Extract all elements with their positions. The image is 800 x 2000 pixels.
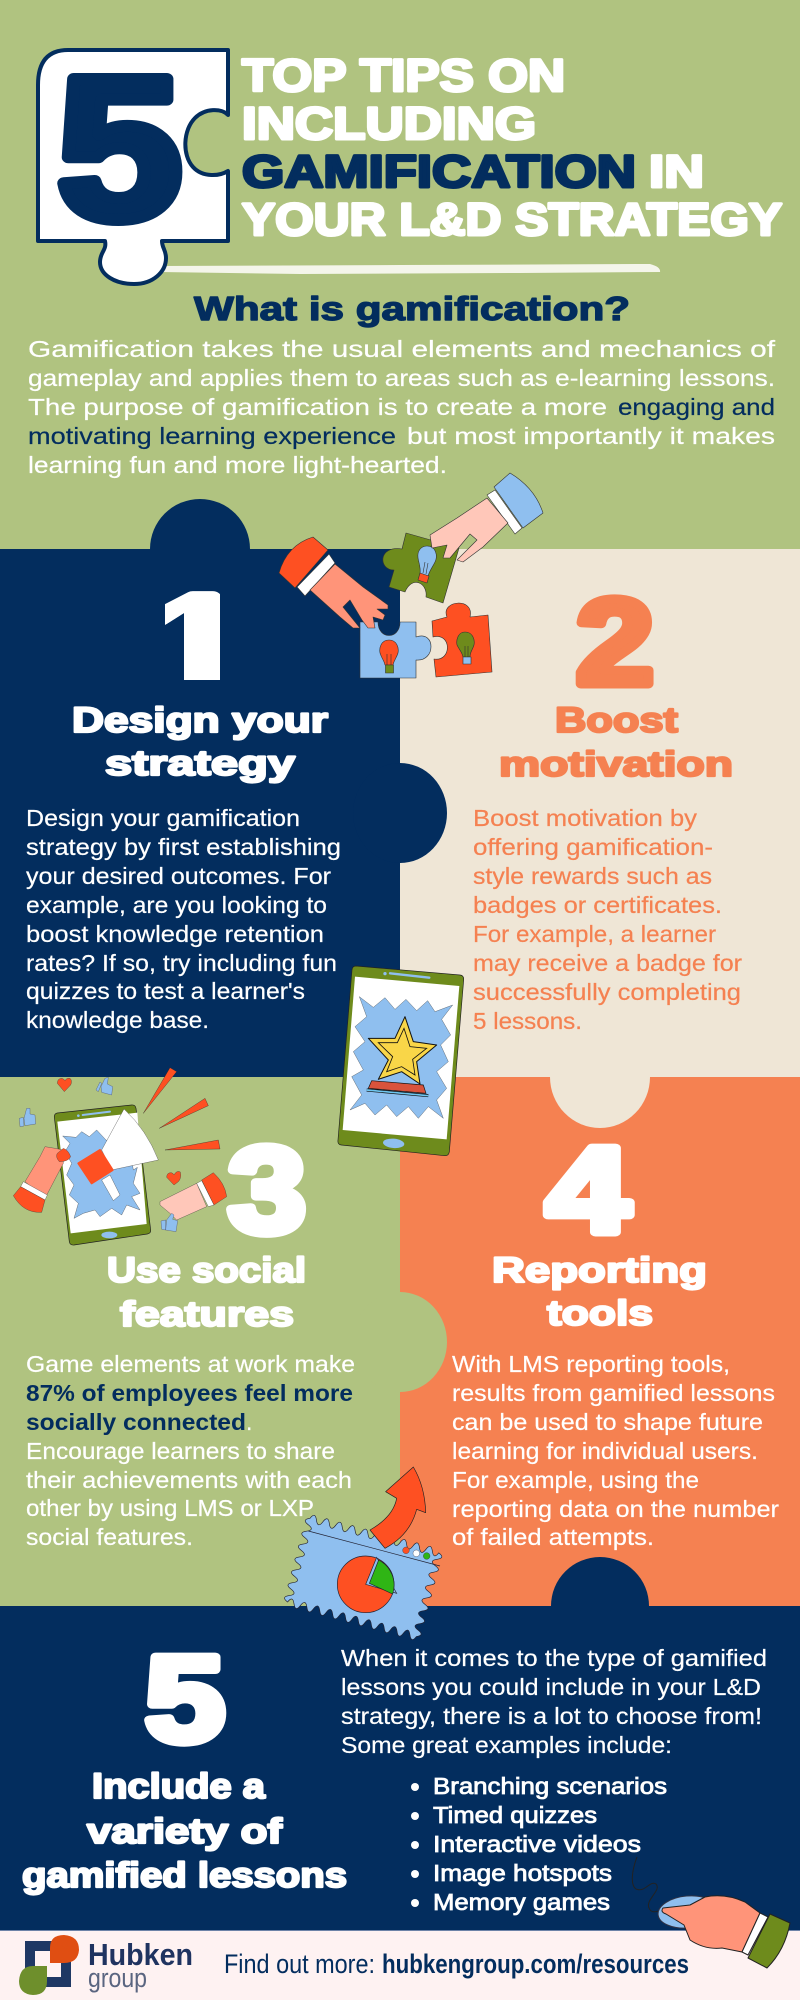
- tip 1 text: Design your gamification: [26, 805, 300, 831]
- tip 5 list: [411, 1773, 667, 1915]
- tip 1 text: quizzes to test a learner's: [26, 978, 305, 1004]
- icon: megaphone: [78, 1109, 158, 1201]
- puzzle tab: tip 2: [550, 1077, 650, 1128]
- tip 3 text: social features.: [26, 1524, 193, 1550]
- tip 3 text: their achievements with each: [26, 1467, 352, 1493]
- panel: tip 3 background: [0, 1077, 400, 1606]
- icon: sound rays: [143, 1068, 220, 1150]
- tip 1 number: 1: [156, 572, 241, 708]
- tip 5 text: lessons you could include in your L&D: [341, 1674, 761, 1700]
- tip 4 text: reporting data on the number: [452, 1496, 779, 1522]
- puzzle tab: tip 3: [353, 1292, 447, 1392]
- tip 4 heading: tools: [547, 1294, 653, 1333]
- tip 5 heading: [22, 1767, 347, 1895]
- tip 5 list: Branching scenarios: [433, 1773, 667, 1799]
- panel: tip 2 background: [400, 549, 800, 1077]
- illustration: tablet with megaphone and hands: [13, 1068, 227, 1245]
- intro text: engaging and: [618, 394, 775, 420]
- illustration: hand on mouse: [632, 1857, 790, 1968]
- tip 5 list: Image hotspots: [433, 1860, 612, 1886]
- tip 4 text: results from gamified lessons: [452, 1380, 775, 1406]
- tip 5 list: Interactive videos: [433, 1831, 641, 1857]
- icon: red puzzle piece: [432, 603, 492, 677]
- logo: Hubken group: [19, 1935, 193, 1995]
- tip 5 number: 5: [145, 1631, 225, 1767]
- tip 2 text: may receive a badge for: [473, 950, 742, 976]
- illustration: hands joining puzzle pieces: [279, 473, 543, 678]
- icon: green puzzle piece: [383, 533, 459, 603]
- logo: Hubken group: group: [88, 1963, 147, 1993]
- tip 5 list: Memory games: [433, 1889, 610, 1915]
- icon: hearts: [57, 1078, 181, 1185]
- tip 1 text: rates? If so, try including fun: [26, 950, 337, 976]
- tip 3 text: Game elements at work make: [26, 1351, 355, 1377]
- tip 2 heading: Boost: [555, 701, 678, 740]
- icon: hand with thumb: [160, 1173, 227, 1220]
- intro text: gameplay and applies them to areas such as e-learning lessons.: [28, 365, 775, 391]
- brush underline: [160, 264, 660, 274]
- tip 2 heading: motivation: [499, 745, 733, 784]
- tip 3 text: .: [246, 1409, 252, 1435]
- icon: mouse: [657, 1893, 719, 1931]
- panel: tip 4 background: [400, 1077, 800, 1606]
- panel: footer: [0, 1930, 800, 2000]
- footer call to action: Find out more:: [224, 1949, 375, 1979]
- tip 2 text: [473, 805, 742, 1034]
- footer call to action: hubkengroup.com/resources: [382, 1949, 689, 1979]
- tip 4 text: learning for individual users.: [452, 1438, 758, 1464]
- tip 2 text: successfully completing: [473, 979, 741, 1005]
- intro text: learning fun and more light-hearted.: [28, 452, 447, 478]
- tip 1 text: [26, 805, 341, 1033]
- tip 2 text: offering gamification-: [473, 834, 713, 860]
- panel: tip 1 background: [0, 499, 400, 1077]
- tip 2 text: badges or certificates.: [473, 892, 722, 918]
- tip 1 text: strategy by first establishing: [26, 834, 341, 860]
- icon: hand: [662, 1896, 760, 1952]
- tip 4 heading: Reporting: [492, 1251, 707, 1290]
- icon: thumbs up: [19, 1077, 178, 1232]
- icon: cuff: [742, 1913, 790, 1968]
- tip 4 text: can be used to shape future: [452, 1409, 763, 1435]
- tip 1 text: boost knowledge retention: [26, 921, 324, 947]
- tip 5 text: When it comes to the type of gamified: [341, 1645, 767, 1671]
- intro text: but most importantly it makes: [407, 423, 775, 449]
- icon: tablet: [54, 1105, 151, 1245]
- tip 4 text: of failed attempts.: [452, 1524, 654, 1550]
- illustration: tablet with star trophy: [338, 966, 464, 1156]
- icon: left hand: [279, 537, 388, 628]
- tip 3 heading: [107, 1251, 306, 1334]
- tip 3 text: [26, 1351, 355, 1550]
- illustration: pie chart window with arrow: [283, 1467, 444, 1641]
- tip 5 heading: variety of: [87, 1812, 282, 1851]
- tip 4 heading: [492, 1251, 707, 1333]
- title: TOP TIPS ON: [242, 50, 565, 101]
- tip 5 list: Timed quizzes: [433, 1802, 597, 1828]
- tip 3 heading: Use social: [107, 1251, 306, 1290]
- puzzle badge with number 5: [38, 35, 228, 284]
- tip 1 text: example, are you looking to: [26, 892, 327, 918]
- icon: mouse cable: [632, 1857, 659, 1912]
- icon: scalloped window: [283, 1513, 444, 1641]
- tip 2 heading: [499, 701, 733, 784]
- tip 2 text: 5 lessons.: [473, 1008, 582, 1034]
- tip 1 text: your desired outcomes. For: [26, 863, 331, 889]
- tip 5 text: Some great examples include:: [341, 1732, 672, 1758]
- tip 1 heading: strategy: [105, 744, 296, 783]
- tip 2 number: 2: [576, 574, 654, 710]
- heading: what is gamification: What is gamification?: [194, 290, 630, 327]
- arrow: [370, 1467, 426, 1548]
- tip 3 text: socially connected: [26, 1409, 246, 1435]
- tip 3 number: 3: [228, 1122, 306, 1258]
- tip 5 text: strategy, there is a lot to choose from!: [341, 1703, 762, 1729]
- icon: window bar: [308, 1531, 440, 1566]
- title: INCLUDING: [242, 98, 536, 149]
- puzzle badge with number 5: 5: [57, 35, 182, 261]
- tip 4 text: [452, 1351, 779, 1550]
- tip 1 heading: [72, 701, 328, 783]
- logo: Hubken group: Hubken: [88, 1937, 193, 1972]
- title: IN: [649, 146, 704, 197]
- puzzle tab: tip 1: [353, 763, 447, 863]
- icon: hand with heart: [13, 1147, 71, 1212]
- tip 5 text: [341, 1645, 767, 1758]
- title: YOUR L&D STRATEGY: [242, 194, 782, 245]
- tip 1 text: knowledge base.: [26, 1007, 209, 1033]
- intro text: [28, 336, 776, 478]
- tip 5 heading: Include a: [92, 1767, 266, 1806]
- title: GAMIFICATION: [242, 146, 636, 197]
- tip 5 heading: gamified lessons: [22, 1856, 347, 1895]
- tip 3 text: 87% of employees feel more: [26, 1380, 353, 1406]
- tip 2 text: For example, a learner: [473, 921, 716, 947]
- pie chart: [337, 1556, 397, 1613]
- footer call to action: [224, 1949, 689, 1979]
- tip 3 text: other by using LMS or LXP: [26, 1495, 314, 1521]
- tip 4 number: 4: [546, 1122, 630, 1258]
- tip 4 text: For example, using the: [452, 1467, 699, 1493]
- tip 2 text: Boost motivation by: [473, 805, 698, 831]
- tip 2 text: style rewards such as: [473, 863, 712, 889]
- icon: right hand: [430, 473, 543, 562]
- panel: tip 5 background: [0, 1557, 800, 1930]
- intro text: motivating learning experience: [28, 423, 396, 449]
- title: [242, 50, 782, 245]
- tip 3 text: Encourage learners to share: [26, 1438, 335, 1464]
- tip 4 text: With LMS reporting tools,: [452, 1351, 730, 1377]
- tip 1 heading: Design your: [72, 701, 328, 740]
- tip 3 heading: features: [120, 1295, 294, 1334]
- intro text: Gamification takes the usual elements and mechanics of: [28, 336, 776, 362]
- intro text: The purpose of gamification is to create a more: [28, 394, 607, 420]
- icon: blue puzzle piece: [360, 622, 431, 678]
